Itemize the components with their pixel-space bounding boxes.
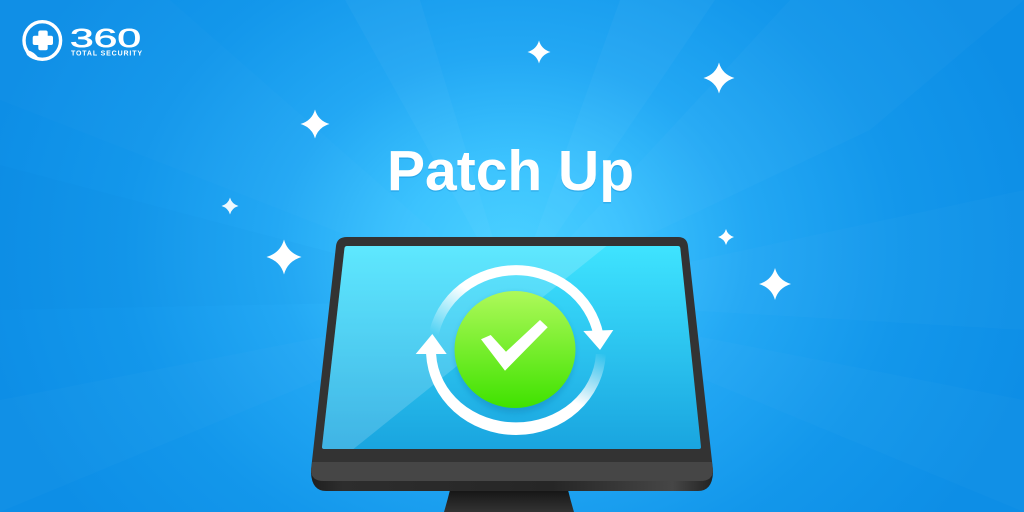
monitor chin <box>311 462 713 481</box>
screen diagonal highlight <box>320 244 609 451</box>
star <box>704 62 734 94</box>
monitor base edge <box>311 470 713 491</box>
star <box>300 110 330 138</box>
monitor bezel <box>311 237 713 481</box>
green circle shadow <box>455 293 575 413</box>
sync icon with check <box>416 270 613 435</box>
star <box>266 240 302 274</box>
logo wordmark 360: 360 <box>70 23 141 53</box>
title: Patch Up <box>387 140 634 204</box>
icon: logo ring with plus <box>24 22 61 60</box>
logo tagline: TOTAL SECURITY <box>71 50 142 58</box>
star <box>222 198 238 214</box>
lower arrow head <box>416 334 447 354</box>
logo: 360 Total Security <box>24 22 142 60</box>
upper arrow arc <box>432 270 598 345</box>
star <box>759 268 791 300</box>
check mark <box>481 320 548 371</box>
star <box>528 40 550 64</box>
star <box>718 229 734 245</box>
upper arrow head <box>583 330 613 350</box>
sparkle stars <box>222 40 791 300</box>
monitor stand <box>444 490 574 512</box>
title: Patch Up <box>387 139 634 203</box>
lower arrow arc <box>426 354 606 435</box>
monitor <box>311 237 713 512</box>
screen <box>320 244 704 451</box>
green circle <box>454 291 576 408</box>
